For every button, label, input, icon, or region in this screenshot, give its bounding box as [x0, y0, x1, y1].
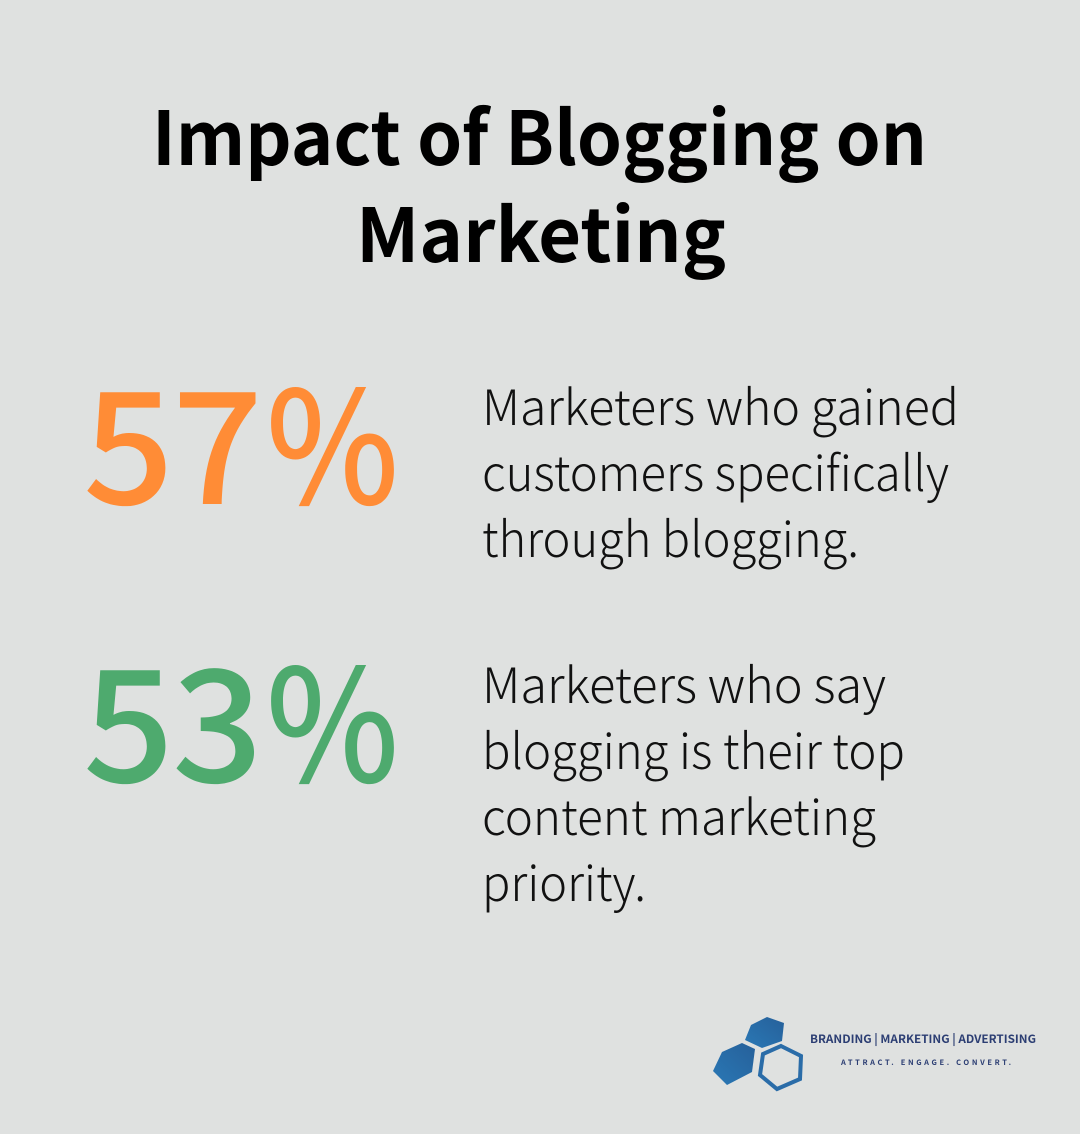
text: 57% description: through blogging. [482, 501, 859, 572]
title: Marketing [356, 177, 726, 284]
logo tagline: ATTRACT. ENGAGE. CONVERT. [840, 1057, 1011, 1068]
logo tagline [810, 1031, 1036, 1068]
stat: 57%: % [266, 323, 399, 549]
logo tagline: BRANDING | MARKETING | ADVERTISING [810, 1031, 1036, 1047]
text: 53% description: priority. [482, 845, 646, 916]
text: 53% description: content marketing [482, 779, 876, 850]
stat: 53%: 3 [172, 601, 263, 827]
stat: 53% [83, 601, 399, 827]
text: 53% description: blogging is their top [482, 713, 905, 784]
text: 53% description [482, 647, 905, 916]
text: 53% description: Marketers who say [482, 647, 886, 718]
text: 57% description [482, 369, 959, 572]
icon: hexagon cluster [713, 1017, 801, 1089]
text: 57% description: Marketers who gained [482, 369, 959, 440]
title [152, 80, 927, 284]
text: 57% description: customers specifically [482, 435, 949, 506]
logo [713, 1017, 1036, 1089]
stat: 57% [83, 323, 399, 549]
title: Impact of Blogging on [152, 80, 927, 187]
stat: 57%: 7 [172, 323, 263, 549]
stat: 53%: 5 [83, 601, 174, 827]
stat: 53%: % [266, 601, 399, 827]
stat: 57%: 5 [83, 323, 174, 549]
